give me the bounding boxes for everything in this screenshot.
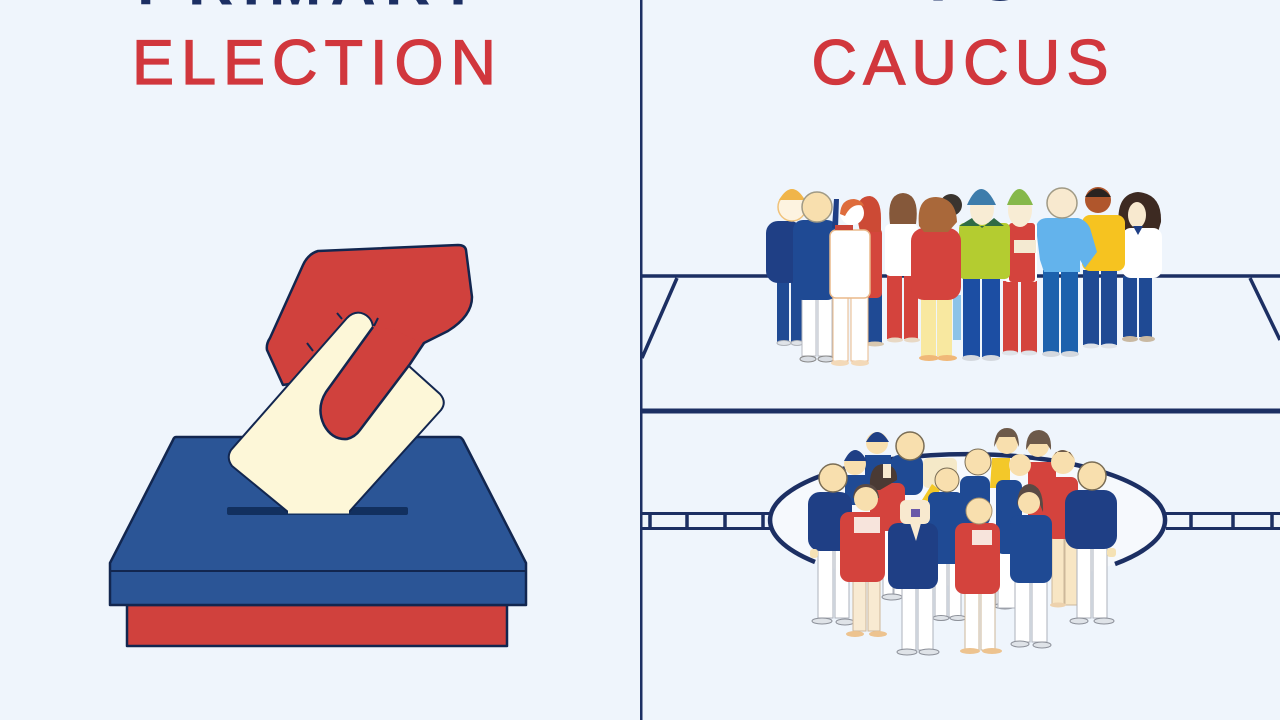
person: right red top, cream legs [1047,450,1078,608]
person: navy top, white trousers [793,192,839,362]
yellow sleeve detail [922,484,940,502]
ballot paper [229,313,444,512]
person: navy mid right [996,454,1031,608]
icon: ballot box with hand [110,245,526,646]
person: lime jacket, blue cap [959,189,1010,361]
person: back red, brown hair [1026,430,1056,520]
ballot box base [127,605,507,646]
person: red outfit, green cap [1002,189,1037,356]
background figures: legs, cream and yellow details [882,458,1015,609]
person: white outfit, orange trim [830,199,870,366]
person: back navy large head [890,432,924,495]
person: dark hair at back [940,194,962,340]
person: back centre navy [960,449,991,526]
knuckle ticks [307,313,378,351]
rail and oval table [642,454,1280,586]
person: red jacket, brown hair [911,197,961,361]
hand back [267,245,472,385]
person: red shirt with logo front [955,498,1002,654]
person: back yellow top [990,428,1019,488]
person: far right navy [1065,462,1117,624]
heading: primary election: ELECTION [132,28,496,98]
person: centre front navy [888,500,939,655]
person: light blue top [1036,188,1097,357]
heading: versus caucus: CAUCUS [812,28,1108,98]
person: yellow jacket [1082,187,1125,348]
person: red hair, navy legs [856,196,884,346]
ballot slot [227,507,408,515]
ballot box lid [110,437,526,605]
center divider [640,0,642,720]
person: curly hair, white top [1118,192,1162,342]
thumb [320,326,424,439]
person: navy with orange hair [766,189,806,346]
group: primary voters standing [766,187,1162,366]
lid edge line [110,570,526,572]
person: navy front right [1010,484,1052,648]
group: caucus participants gathered [808,428,1117,655]
person: back navy hair left [844,450,869,505]
person: back navy hair [865,432,891,495]
person: red top, dark hair [870,464,905,531]
person: red shirt with logo left [840,484,887,637]
person: navy mid centre [928,468,966,620]
floor lines upper [642,276,1280,411]
person: far left navy [808,464,854,625]
person: brown hair, white top [885,193,920,342]
